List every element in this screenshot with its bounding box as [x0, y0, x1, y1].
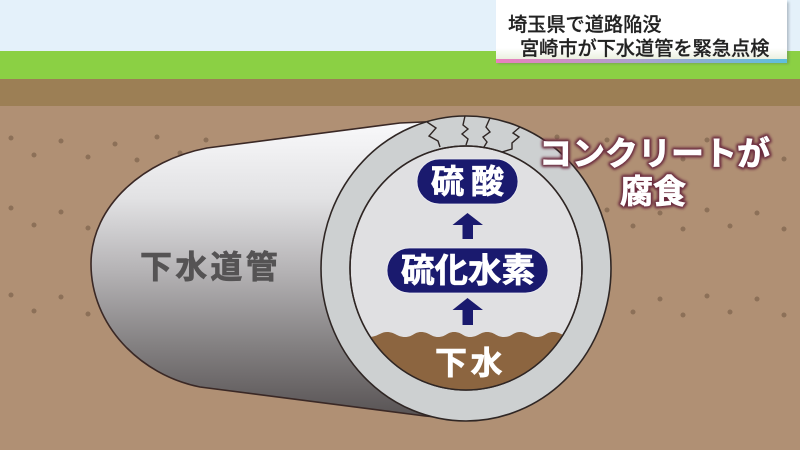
arrow: up to sulfuric acid — [452, 213, 483, 239]
callout: concrete corrosion: 腐食 — [620, 173, 686, 210]
pipe inner cavity — [350, 146, 582, 390]
pill: hydrogen sulfide — [387, 248, 548, 293]
pipe outer ring — [321, 116, 611, 421]
concrete cracks — [427, 116, 520, 152]
pill: hydrogen sulfide: 硫化水素 — [401, 253, 535, 290]
sewage water — [371, 332, 562, 390]
caption text — [508, 14, 769, 60]
sky — [0, 0, 800, 51]
grass — [0, 51, 800, 79]
callout: concrete corrosion: コンクリートが — [539, 135, 770, 172]
pipe body — [91, 120, 470, 420]
pipe label: 下水道管 — [140, 249, 281, 285]
arrow: up to hydrogen sulfide — [452, 298, 483, 325]
soil dots — [8, 134, 786, 318]
pill: sulfuric acid: 硫酸 — [431, 163, 511, 200]
caption colour strip — [496, 59, 787, 63]
water label: 下水 — [435, 345, 506, 381]
callout: concrete corrosion: コンクリートが — [539, 135, 770, 172]
caption text: 埼玉県で道路陥没 — [508, 14, 662, 36]
pill: sulfuric acid — [417, 159, 518, 204]
sewer pipe — [91, 116, 611, 421]
caption text: 宮崎市が下水道管を緊急点検 — [520, 38, 769, 60]
inner cavity outline — [350, 146, 582, 390]
callout: concrete corrosion — [539, 135, 770, 210]
soil — [0, 106, 800, 450]
topsoil band — [0, 79, 800, 106]
news caption box — [496, 0, 789, 64]
callout: concrete corrosion: 腐食 — [620, 173, 686, 210]
